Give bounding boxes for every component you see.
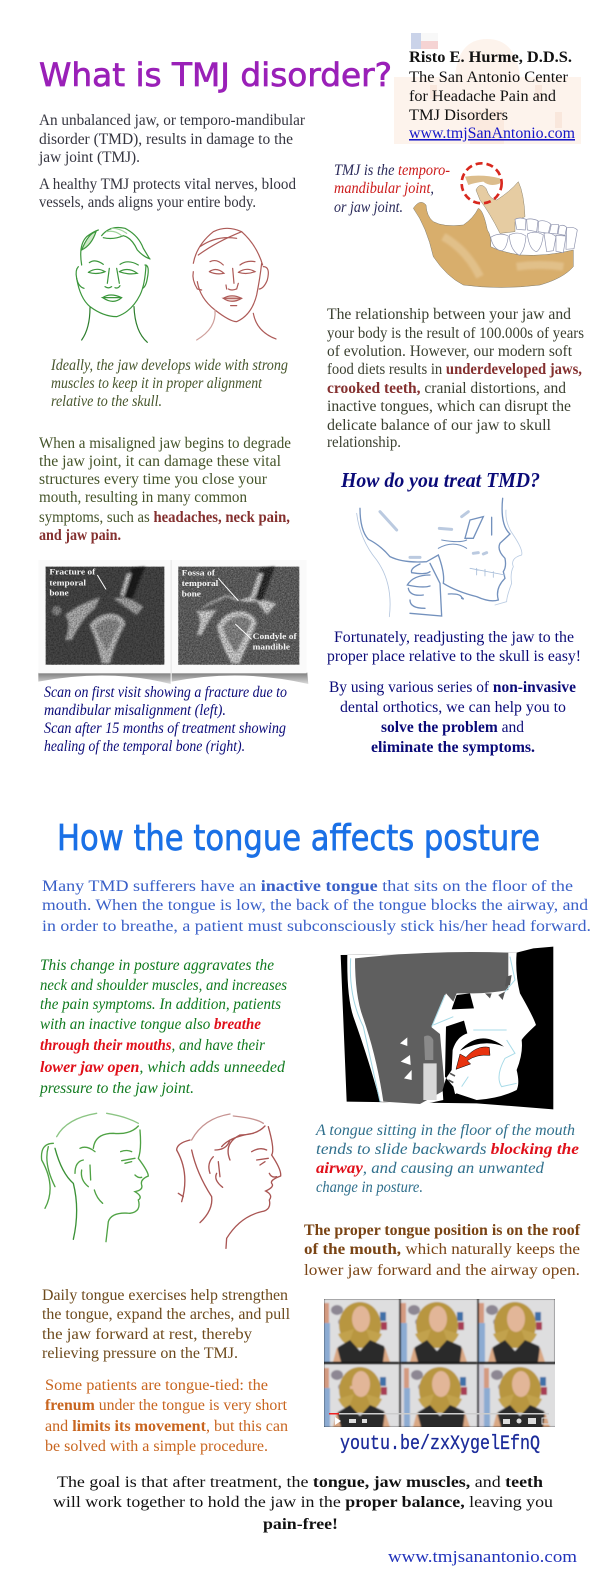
right scan: [178, 567, 299, 665]
icon: faint Alamo building: [394, 39, 581, 144]
icon: misaligned face, red line drawing: [193, 228, 276, 340]
caption: scans: Scan on first visit showing a fracture due to: [44, 684, 287, 701]
scans panel: [38, 560, 308, 684]
text: posture change: the pain symptoms. In addition, patients: [40, 996, 281, 1013]
text: tongue exercises: the tongue, expand the arches, and pull: [42, 1306, 290, 1323]
left scan: temporal: [49, 578, 87, 587]
icon: faint Texas flag: [411, 33, 438, 49]
icon: red profile: [177, 1114, 281, 1248]
text: misaligned jaw symptoms: symptoms, such as headaches, neck pain,: [39, 509, 290, 526]
text: misaligned jaw symptoms: When a misaligned jaw begins to degrade: [39, 435, 291, 452]
text: tongue-tied: frenum under the tongue is very short: [45, 1397, 288, 1414]
icon: healthy face, green line drawing: [76, 228, 150, 342]
text: posture change: [39, 957, 287, 1097]
title: How the tongue affects posture: How the tongue affects posture: [57, 818, 540, 859]
text: inactive tongue: [42, 878, 591, 935]
intro text: An unbalanced jaw, or temporo-mandibular: [39, 112, 306, 129]
contact text: Risto E. Hurme, D.D.S.: [409, 49, 572, 66]
text: posture change: with an inactive tongue also breathe: [40, 1016, 261, 1033]
TMJ caption: mandibular joint,: [334, 180, 434, 197]
intro text: jaw joint (TMJ).: [38, 149, 140, 166]
text: posture change: through their mouths, and have their: [40, 1037, 266, 1054]
text: treatment: proper place relative to the skull is easy!: [327, 648, 581, 665]
dashed circle: [462, 163, 502, 203]
intro text: disorder (TMD), results in damage to the: [39, 131, 293, 148]
contact text: for Headache Pain and: [409, 88, 556, 105]
contact text: TMJ Disorders: [409, 107, 508, 124]
text: tongue exercises: [42, 1287, 290, 1362]
left scan: [46, 567, 164, 665]
text: proper tongue position: lower jaw forward and the airway open.: [304, 1262, 580, 1279]
caption: scans: mandibular misalignment (left).: [44, 702, 226, 719]
heading: How do you treat TMD?: How do you treat TMD?: [340, 468, 540, 492]
right scan: mandible: [253, 642, 290, 651]
video player controls: [329, 1413, 549, 1425]
text: inactive tongue: Many TMD sufferers have an inactive tongue that sits on the floor of the: [42, 878, 573, 895]
teeth: [491, 218, 577, 255]
title: What is TMJ disorder?: What is TMJ disorder?: [39, 56, 392, 94]
caption: ideal jaw: relative to the skull.: [51, 393, 162, 410]
caption: ideal jaw: Ideally, the jaw develops wide with strong: [50, 357, 288, 374]
intro text: vessels, ands aligns your entire body.: [39, 194, 256, 211]
contact text: [409, 49, 575, 142]
caption: tongue sliding back: airway, and causing an unwanted: [316, 1160, 544, 1177]
text: tongue-tied: [45, 1377, 288, 1455]
text: goal conclusion: [53, 1474, 553, 1533]
link: YouTube: youtu.be/zxXygelEfnQ: [340, 1433, 540, 1456]
text: posture change: This change in posture aggravates the: [40, 957, 274, 974]
TMJ caption: TMJ is the temporo-: [334, 162, 450, 179]
caption: scans: Scan after 15 months of treatment showing: [44, 720, 286, 737]
icon: green profile: [41, 1113, 148, 1242]
text: treatment: Fortunately, readjusting the jaw to the: [334, 629, 574, 646]
text: misaligned jaw symptoms: the jaw joint, it can damage these vital: [39, 453, 281, 470]
text: proper tongue position: of the mouth, which naturally keeps the: [304, 1241, 580, 1258]
text: goal conclusion: will work together to hold the jaw in the proper balance, leaving you: [53, 1494, 553, 1511]
right scan: Fossa of: [182, 568, 215, 577]
text: goal conclusion: The goal is that after treatment, the tongue, jaw muscles, and teeth: [57, 1474, 543, 1491]
text: evolution of the jaw: inactive tongues, which can disrupt the: [327, 398, 571, 415]
head x-ray illustration: [341, 947, 553, 1109]
text: treatment: eliminate the symptoms.: [371, 739, 535, 756]
header: practice contact with faint Alamo and flag backdrop: [394, 33, 581, 144]
text: treatment: solve the problem and: [381, 719, 524, 736]
link: website footer: www.tmjsanantonio.com: [388, 1547, 577, 1566]
text: treatment: By using various series of non-invasive: [329, 679, 576, 696]
text: tongue exercises: relieving pressure on the TMJ.: [42, 1345, 238, 1362]
TMJ caption: or jaw joint.: [334, 199, 403, 216]
text: evolution of the jaw: crooked teeth, cranial distortions, and: [327, 380, 566, 397]
text: misaligned jaw symptoms: and jaw pain.: [39, 527, 121, 544]
text: posture change: lower jaw open, which adds unneeded: [40, 1059, 285, 1076]
caption: tongue sliding back: change in posture.: [316, 1179, 423, 1196]
caption: tongue sliding back: tends to slide backwards blocking the: [316, 1141, 579, 1158]
text: tongue-tied: Some patients are tongue-tied: the: [45, 1377, 268, 1394]
contact text: www.tmjSanAntonio.com: [409, 125, 575, 142]
caption: scans: [44, 684, 287, 755]
text: goal conclusion: pain-free!: [263, 1516, 338, 1533]
right scan: bone: [182, 589, 201, 598]
text: treatment: [327, 629, 581, 756]
TMJ caption: [334, 162, 450, 216]
text: evolution of the jaw: delicate balance of our jaw to skull: [327, 417, 551, 434]
caption: scans: healing of the temporal bone (right).: [44, 738, 245, 755]
icon: red arrow: [456, 1047, 490, 1069]
caption: tongue sliding back: A tongue sitting in the floor of the mouth: [315, 1122, 575, 1139]
text: tongue-tied: be solved with a simple procedure.: [45, 1438, 268, 1455]
text: misaligned jaw symptoms: [39, 435, 291, 544]
intro text: [38, 112, 306, 211]
text: evolution of the jaw: of evolution. However, our modern soft: [327, 343, 573, 360]
contact text: The San Antonio Center: [409, 69, 569, 86]
text: evolution of the jaw: [327, 306, 584, 451]
right scan: temporal: [182, 579, 219, 588]
text: evolution of the jaw: food diets results in underdeveloped jaws,: [327, 361, 582, 378]
left scan: bone: [49, 589, 69, 598]
text: tongue-tied: and limits its movement , but this can: [45, 1418, 288, 1435]
left scan: Fracture of: [49, 568, 96, 577]
text: inactive tongue: mouth. When the tongue is low, the back of the tongue blocks the airway, and: [42, 897, 588, 914]
text: proper tongue position: [304, 1222, 581, 1279]
text: treatment: dental orthotics, we can help you to: [340, 699, 566, 716]
text: inactive tongue: in order to breathe, a patient must subconsciously stick his/her head forward.: [42, 918, 591, 935]
caption: ideal jaw: [50, 357, 288, 410]
text: posture change: pressure to the jaw joint.: [39, 1080, 194, 1097]
text: misaligned jaw symptoms: structures every time you close your: [39, 471, 268, 488]
text: tongue exercises: Daily tongue exercises help strengthen: [42, 1287, 288, 1304]
text: posture change: neck and shoulder muscles, and increases: [40, 977, 287, 994]
text: tongue exercises: the jaw forward at rest, thereby: [42, 1326, 252, 1343]
caption: tongue sliding back: [315, 1122, 579, 1196]
text: evolution of the jaw: The relationship between your jaw and: [327, 306, 571, 323]
video thumbnail grid: [324, 1299, 560, 1427]
right scan: Condyle of: [253, 632, 297, 641]
text: misaligned jaw symptoms: mouth, resulting in many common: [39, 489, 247, 506]
text: proper tongue position: The proper tongue position is on the roof: [304, 1222, 581, 1239]
text: evolution of the jaw: relationship.: [327, 434, 401, 451]
intro text: A healthy TMJ protects vital nerves, blood: [39, 176, 296, 193]
caption: ideal jaw: muscles to keep it in proper alignment: [51, 375, 263, 392]
jaw illustration with dashed circle on the joint: [413, 163, 577, 287]
icon: skull and neck line drawing: [357, 498, 522, 617]
text: evolution of the jaw: your body is the result of 100.000s of years: [327, 325, 584, 342]
